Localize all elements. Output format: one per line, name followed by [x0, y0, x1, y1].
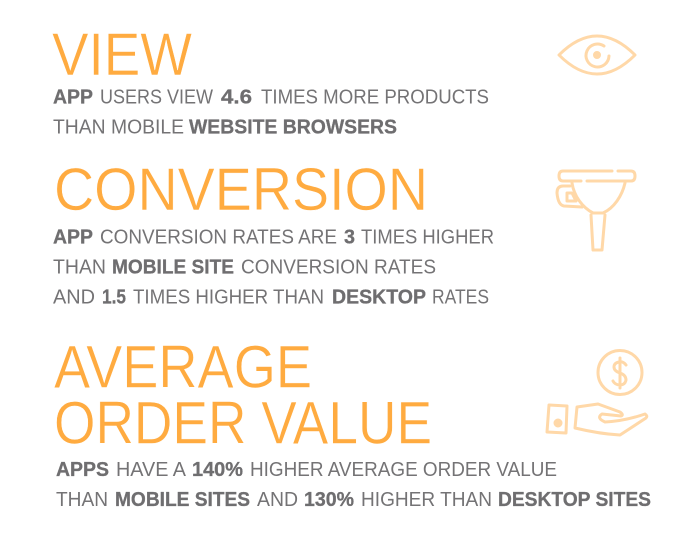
text block: conversion description: THAN	[53, 256, 106, 278]
text block: view description	[53, 86, 489, 138]
text block: view description: WEBSITE BROWSERS	[189, 116, 397, 138]
text block: conversion description: TIMES HIGHER THAN	[133, 286, 324, 308]
text block: view description: 4.6	[221, 86, 252, 108]
text block: conversion description: MOBILE SITE	[112, 256, 234, 278]
text block: average order value description: APPS	[56, 459, 109, 481]
text block: conversion description: DESKTOP	[332, 286, 426, 308]
heading: conversion: CONVERSION	[54, 156, 428, 223]
text block: conversion description: CONVERSION RATES ARE	[100, 226, 337, 248]
text block: average order value description: THAN	[56, 489, 108, 511]
text block: conversion description: RATES	[432, 286, 489, 308]
icon: hand with coin	[547, 350, 647, 435]
text block: average order value description: HIGHER THAN	[361, 489, 492, 511]
text block: conversion description: CONVERSION RATES	[241, 256, 436, 278]
icon: eye	[559, 36, 635, 74]
heading: average order value: ORDER VALUE	[54, 390, 432, 456]
text block: conversion description: APP	[53, 226, 93, 248]
text block: average order value description: HAVE A	[116, 459, 187, 481]
heading: average order value: AVERAGE	[54, 334, 312, 400]
text block: average order value description: HIGHER AVERAGE ORDER VALUE	[250, 459, 557, 481]
heading: average order value	[54, 334, 432, 456]
text block: conversion description: TIMES HIGHER	[361, 226, 494, 248]
text block: average order value description: MOBILE SITES	[115, 489, 250, 511]
text block: average order value description: 140%	[192, 459, 243, 481]
text block: view description: THAN MOBILE	[53, 116, 184, 138]
text block: conversion description: 3	[344, 226, 355, 248]
text block: conversion description	[53, 226, 494, 308]
heading: view: VIEW	[52, 21, 192, 88]
text block: average order value description: DESKTOP SITES	[498, 489, 651, 511]
text block: view description: USERS VIEW	[100, 86, 213, 108]
text block: conversion description: 1.5	[102, 286, 126, 308]
text block: average order value description	[56, 459, 651, 511]
text block: average order value description: AND	[257, 489, 298, 511]
icon: funnel	[557, 171, 635, 250]
text block: average order value description: 130%	[304, 489, 354, 511]
text block: view description: APP	[53, 86, 93, 108]
text block: view description: TIMES MORE PRODUCTS	[261, 86, 489, 108]
text block: conversion description: AND	[53, 286, 95, 308]
